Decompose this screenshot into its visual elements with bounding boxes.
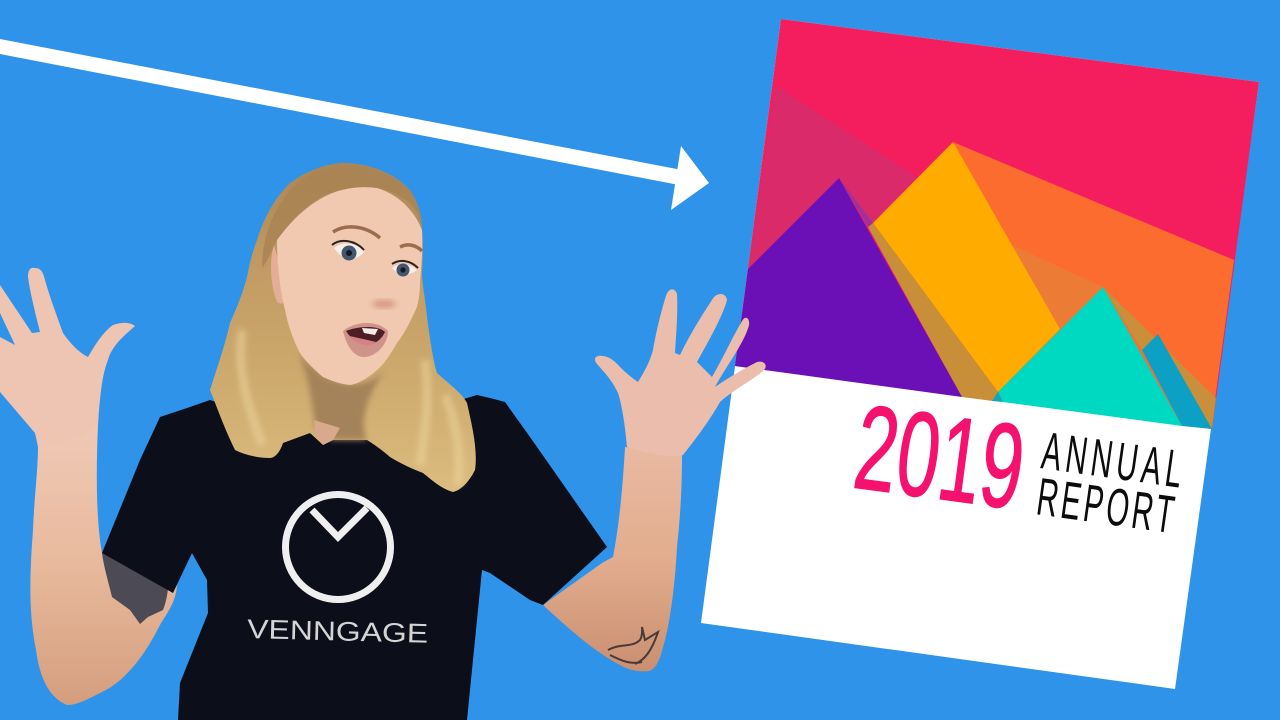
teal mountain [998, 287, 1182, 426]
face [277, 187, 422, 385]
mauve strip [839, 178, 873, 227]
left hand [0, 268, 135, 447]
right hand [595, 289, 766, 456]
nose [372, 300, 396, 308]
shirt logo [286, 494, 390, 600]
pink background [735, 19, 1259, 429]
annual report cover [701, 19, 1259, 689]
hair [210, 163, 476, 492]
left arm [30, 425, 177, 705]
tan band right [1103, 287, 1216, 429]
black shirt [102, 395, 607, 720]
soft orange shade [1012, 245, 1103, 329]
purple mountain [735, 178, 962, 397]
small blue corner [992, 392, 1003, 402]
hair highlights [241, 330, 459, 485]
neck skin [314, 420, 340, 445]
orange shape [953, 142, 1234, 429]
eyes [332, 227, 422, 276]
presenter [0, 163, 766, 720]
left arm tattoo [102, 553, 168, 624]
yellow shape [873, 142, 1060, 392]
shirt brand text: VENNGAGE [247, 614, 429, 649]
mouth [343, 323, 388, 357]
title year: 2019 [848, 380, 1032, 535]
white page [701, 19, 1259, 689]
title words: REPORT [1033, 467, 1178, 545]
arrow pointing to report [0, 39, 709, 210]
blue mountain [1142, 334, 1212, 429]
dark pink triangle [748, 86, 917, 269]
right arm tattoo [608, 627, 658, 664]
right arm [543, 447, 682, 671]
forehead hair shade [262, 166, 422, 268]
tan band left [868, 223, 998, 401]
hair shadow near neck [298, 352, 385, 440]
title words [1033, 421, 1186, 545]
ear [271, 245, 286, 304]
title words: ANNUAL [1038, 421, 1186, 500]
